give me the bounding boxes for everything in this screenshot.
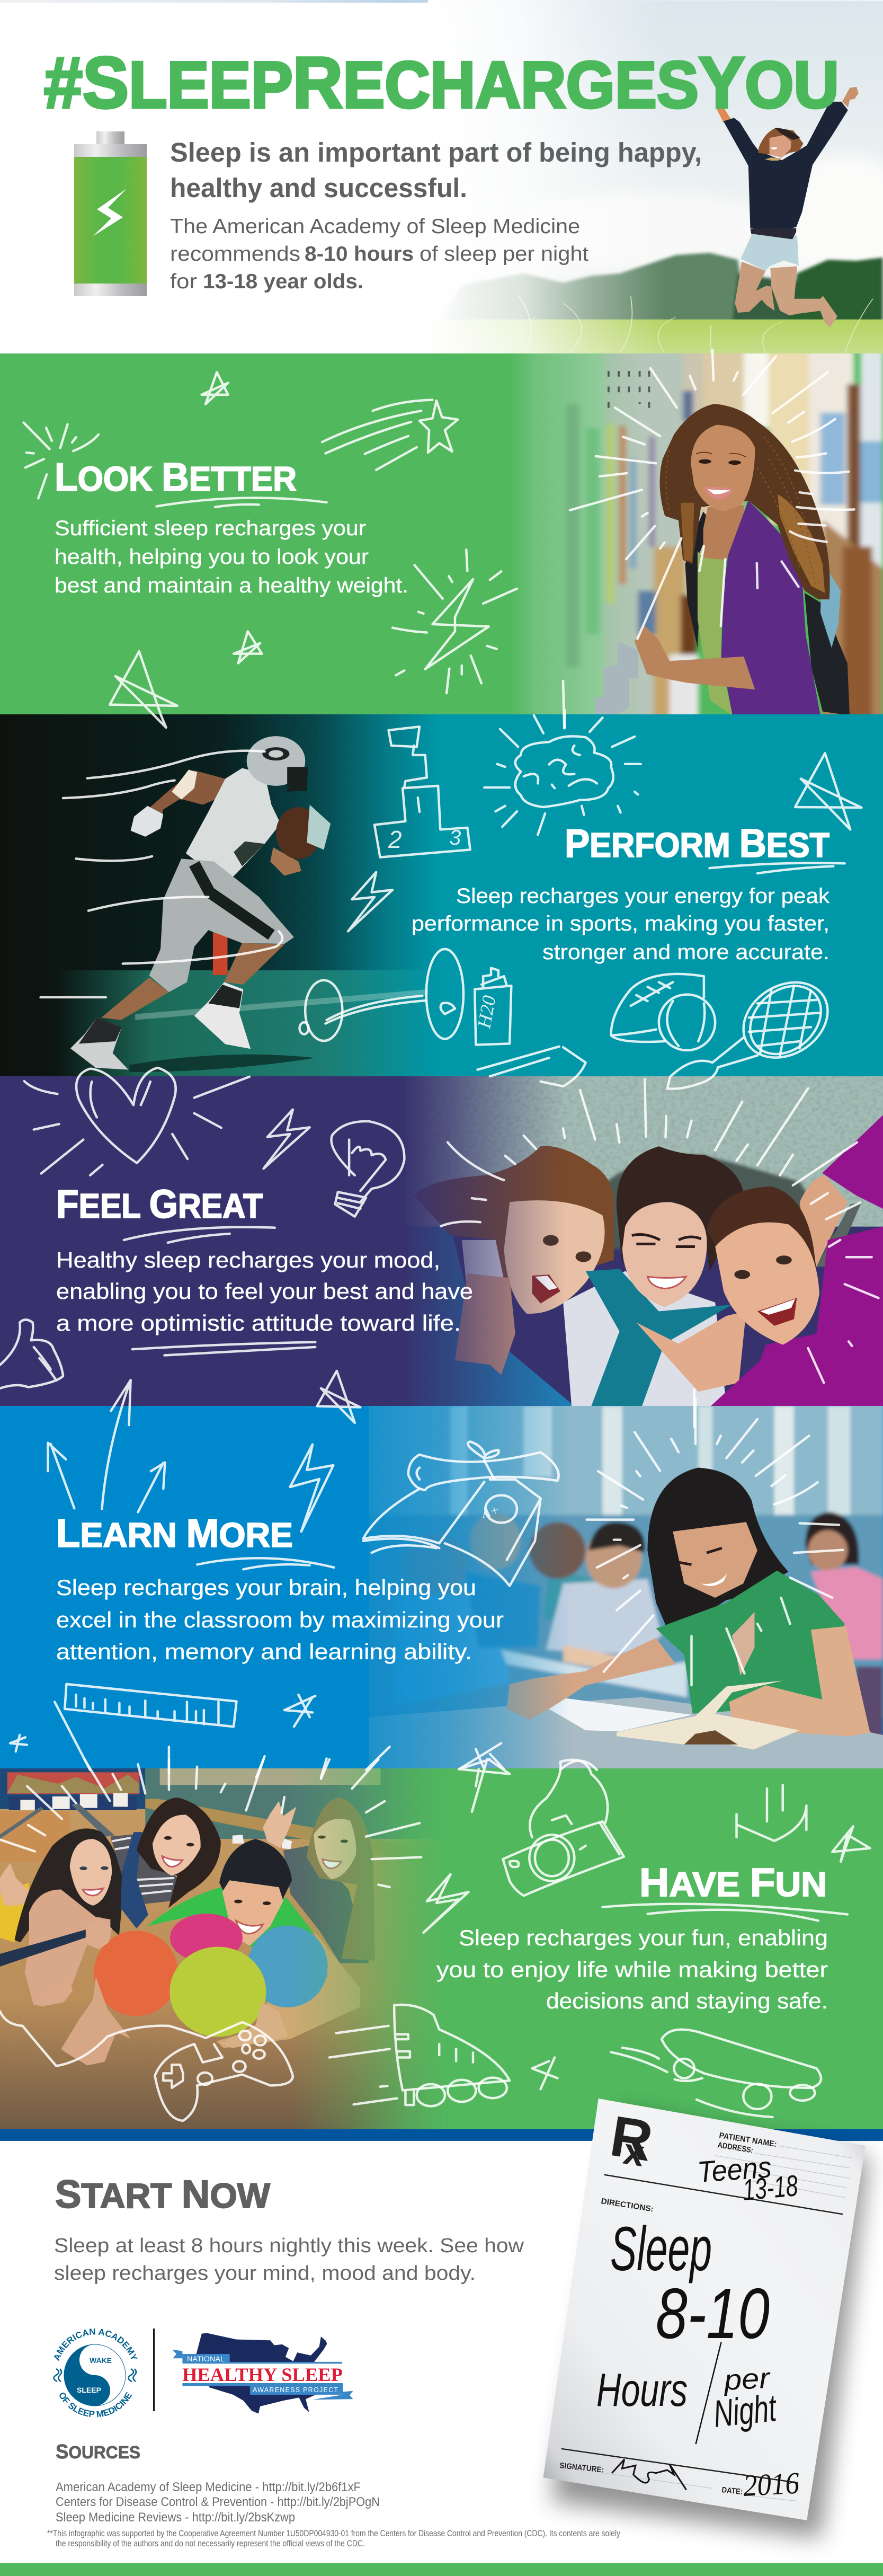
logo: American Academy of Sleep Medicine: WAKE (90, 2356, 112, 2365)
body text: feel great: a more optimistic attitude toward life. (56, 1311, 461, 1335)
source list: American Academy of Sleep Medicine - http://bit.ly/2b6f1xF (56, 2480, 361, 2494)
footnote: the responsibility of the authors and do not necessarily represent the official views of the CDC. (56, 2538, 365, 2548)
body text: feel great (56, 1247, 473, 1335)
handwriting: directions: per (722, 2362, 772, 2396)
body text: have fun (436, 1925, 828, 2013)
panel: perform best (0, 710, 883, 1081)
logo: National Healthy Sleep Awareness Project: AWARENESS PROJECT (253, 2386, 338, 2394)
body text: perform best (412, 884, 830, 964)
intro recommendation text (170, 215, 588, 293)
form labels (559, 2131, 778, 2497)
logo: American Academy of Sleep Medicine: OF SLEEP MEDICINE (59, 2392, 132, 2418)
bowling balls (94, 1914, 328, 2037)
handwriting: patient: 13-18 (742, 2168, 799, 2207)
panel: header (0, 0, 883, 353)
handwriting: directions: 8-10 (656, 2273, 770, 2353)
intro heading (170, 137, 702, 203)
figure: girl right (233, 1798, 375, 1963)
logo: National Healthy Sleep Awareness Project (172, 2333, 353, 2414)
logo: National Healthy Sleep Awareness Project: NATIONAL (187, 2354, 225, 2363)
body text: learn more: excel in the classroom by maximizing your (56, 1607, 504, 1632)
photo: football player running (0, 714, 428, 1076)
heading: start now: START NOW (55, 2172, 271, 2216)
form labels: DATE: (721, 2485, 743, 2497)
intro recommendation text: recommends (170, 243, 300, 265)
body text: perform best: performance in sports, making you faster, (412, 912, 830, 935)
figure: jumping teen (716, 87, 859, 327)
intro heading: Sleep is an important part of being happy, (170, 137, 702, 167)
form labels: PATIENT NAME: (718, 2131, 778, 2149)
body text: look better (55, 517, 408, 597)
logo: American Academy of Sleep Medicine (53, 2329, 138, 2418)
body text: have fun: you to enjoy life while making better (436, 1957, 828, 1982)
figure: girl in the middle (563, 1146, 746, 1406)
body text: learn more: attention, memory and learning ability. (56, 1639, 472, 1664)
body text: learn more: Sleep recharges your brain, helping you (56, 1575, 476, 1600)
photo: students in a classroom (369, 1406, 883, 1768)
figure: girl (635, 404, 850, 715)
figure: boy in purple (707, 1115, 883, 1406)
body text: look better: Sufficient sleep recharges your (55, 517, 366, 540)
body text: look better: best and maintain a healthy weight. (55, 574, 408, 597)
title: #SLEEPRECHARGESYOU (44, 42, 839, 123)
doodles: have fun (0, 1759, 870, 2121)
handwriting: directions: Sleep (610, 2214, 712, 2284)
figure: girl with red hair (405, 1146, 614, 1406)
doodle label: diploma badge: A+ (479, 1502, 501, 1521)
body text: feel great: Healthy sleep recharges your mood, (56, 1247, 440, 1272)
doodles: perform best (41, 710, 862, 1089)
body text: have fun: decisions and staying safe. (546, 1988, 828, 2013)
Rx symbol: R (606, 2103, 657, 2173)
photo: girl at lockers (517, 353, 883, 714)
icon: battery (74, 131, 147, 296)
form labels: ADDRESS: (717, 2140, 754, 2155)
Rx symbol: x (621, 2130, 647, 2174)
panel: feel great (0, 1070, 883, 1420)
handwriting: patient (696, 2150, 799, 2207)
panel: learn more (0, 1399, 883, 1770)
body text: perform best: Sleep recharges your energy for peak (456, 884, 830, 908)
doodle labels: podium numbers: 2 (388, 826, 402, 853)
logo: American Academy of Sleep Medicine: AMERICAN ACADEMY (54, 2329, 138, 2361)
heading: have fun: HAVE FUN (639, 1860, 827, 1905)
figure: girl left (0, 1828, 123, 2007)
body text: look better: health, helping you to look your (55, 545, 369, 569)
handwriting: date: 2016 (742, 2466, 800, 2503)
figure: girl reading (507, 1467, 870, 1750)
figure: boy (147, 1839, 360, 2048)
panel: look better (0, 349, 883, 722)
intro recommendation text: The American Academy of Sleep Medicine (170, 215, 580, 238)
doodles: look better (24, 350, 854, 728)
mark: signature scribble (612, 2459, 686, 2490)
heading: learn more: LEARN MORE (56, 1511, 293, 1555)
body text: start now: Sleep at least 8 hours nightly this week. See how (54, 2235, 524, 2257)
source list: Sleep Medicine Reviews - http://bit.ly/2bsKzwp (56, 2510, 295, 2525)
doodle labels: podium numbers: 3 (449, 826, 461, 849)
body text: learn more (56, 1575, 504, 1664)
intro recommendation text: of sleep per night (420, 243, 588, 265)
doodle label: water bottle: H20 (473, 994, 500, 1030)
body text: feel great: enabling you to feel your best and have (56, 1279, 473, 1304)
source list (56, 2480, 380, 2525)
handwriting: directions (596, 2214, 779, 2436)
logo: National Healthy Sleep Awareness Project: HEALTHY SLEEP (182, 2364, 343, 2385)
form labels: DIRECTIONS: (600, 2197, 654, 2214)
heading: look better: LOOK BETTER (55, 455, 297, 499)
body text: perform best: stronger and more accurate. (542, 941, 830, 964)
figure: girl with dark hair (110, 1798, 221, 1928)
heading: perform best: PERFORM BEST (565, 821, 830, 865)
illustration: prescription pad (543, 2099, 869, 2538)
panel: start now (0, 2129, 883, 2576)
footnote: **This infographic was supported by the Cooperative Agreement Number 1U50DP004930-01 from the Centers for Disease Control and Prevention (CDC). Its contents are solely (47, 2528, 620, 2538)
doodles: learn more (10, 1380, 843, 1777)
photo: friends with bowling balls (0, 1768, 448, 2129)
body text: start now (54, 2235, 524, 2285)
source list: Centers for Disease Control & Prevention - http://bit.ly/2bjPOgN (56, 2495, 380, 2509)
intro recommendation text: 8-10 hours (305, 243, 414, 265)
doodles: feel great (0, 1068, 878, 1427)
handwriting: directions: Night (711, 2387, 779, 2436)
intro heading: healthy and successful. (170, 173, 467, 203)
doodle labels: podium numbers (388, 826, 461, 853)
heading: feel great: FEEL GREAT (56, 1182, 263, 1226)
figure: player (70, 736, 331, 1070)
heading: sources: SOURCES (56, 2441, 140, 2463)
logo: American Academy of Sleep Medicine: SLEEP (77, 2386, 101, 2394)
body text: start now: sleep recharges your mind, mood and body. (54, 2262, 476, 2285)
handwriting: patient: Teens (696, 2150, 772, 2189)
body text: have fun: Sleep recharges your fun, enabling (459, 1925, 828, 1950)
handwriting: directions: Hours (596, 2363, 688, 2416)
photo: sky, trees and grass field (428, 0, 883, 353)
intro recommendation text: for (170, 270, 197, 293)
form labels: SIGNATURE: (559, 2461, 604, 2475)
footnote (47, 2528, 620, 2548)
intro recommendation text: 13-18 year olds. (203, 270, 363, 293)
panel: have fun (0, 1768, 883, 2131)
photo: three friends on a carpet (413, 1076, 883, 1406)
